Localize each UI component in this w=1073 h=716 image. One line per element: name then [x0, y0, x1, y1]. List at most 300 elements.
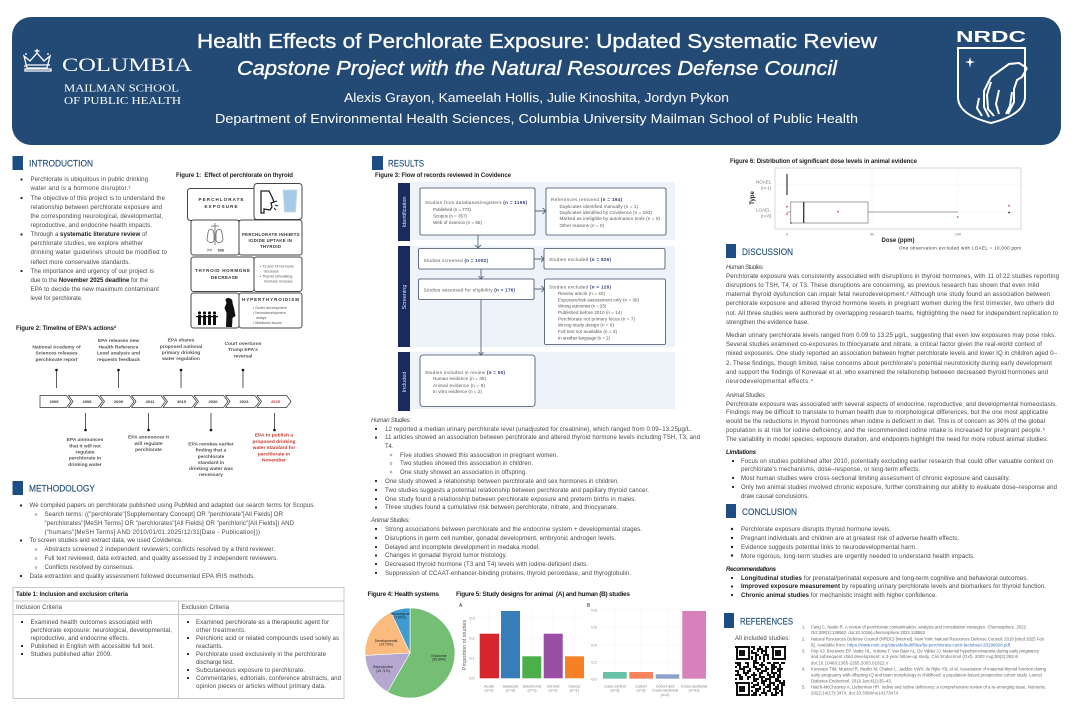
discussion text: limitations: Most human studies were cross-sectional limiting assessment of chronic exposure and causality. [741, 475, 1010, 482]
conclusion bullets: Pregnant individuals and children are at greatest risk of adverse health effects. [741, 535, 959, 542]
results text: human and animal studies: One study showed a relationship between perchlorate and sex hormones in children. [385, 478, 619, 485]
table 1: inclusion and exclusion criteria [13, 588, 344, 698]
results text: human and animal studies: Strong associations between perchlorate and the endocrine system + developmental stages. [385, 526, 642, 533]
figure 4: health systems pie chart: (15.71%) [376, 669, 390, 673]
figure 2: timeline of EPA's actions: regulate [75, 450, 95, 456]
chart A: animal studies: (n=3) [506, 688, 516, 692]
department: Department of Environmental Health Sciences, Columbia University Mailman School of Public Health [215, 111, 858, 126]
logo: Columbia Mailman School: COLUMBIA [62, 55, 192, 76]
reference list: early pregnancy with offspring IQ and brain morphology in childhood: a population-based prospective cohort study. Lancet [811, 672, 1043, 678]
figure 3: flow of records: In another language (n = 2) [558, 336, 610, 340]
figure 2: timeline of EPA's actions: perchlorate [135, 447, 162, 453]
results text: human and animal studies: Two studies showed this association in children. [400, 460, 533, 467]
heading: discussion [726, 244, 793, 258]
figure 2: timeline of EPA's actions: Sciences releases [35, 351, 78, 357]
reference list: Hatch-McChesney A, Lieberman HR. Iodine and Iodine deficiency: a comprehensive review of a re-emerging issue. Nutrients. [811, 684, 1046, 690]
introduction text: drinking water guidelines should be modified to [30, 249, 168, 256]
figure 3: flow of records: Web of Science (n = 65) [433, 220, 482, 225]
conclusion bullets: Evidence suggests potential links to neurodevelopmental harm. [741, 544, 917, 551]
figure 3: flow of records: In vitro evidence (n = 2) [433, 389, 482, 394]
table 1: inclusion and exclusion criteria: opinion pieces or articles without primary data. [196, 683, 326, 690]
results text: human and animal studies: Animal Studies: [370, 517, 410, 524]
figure 3: flow of records: Studies from databases/registers (n = 1195) [425, 200, 527, 205]
table 1: inclusion and exclusion criteria: Subcutaneous exposure to perchlorate. [196, 667, 305, 674]
discussion text: human studies: mixed exposures. One study reported an association between higher perchlorate levels and lower IQ in children aged 0– [726, 350, 1058, 357]
chart B: human studies: Cross-sectional [681, 684, 707, 688]
discussion text: human studies: Human Studies [726, 264, 763, 271]
results text: human and animal studies: Three studies found a cumulative risk between perchlorate, nitrate, and thiocyanate. [385, 504, 618, 511]
figure 1: effect of perchlorate on thyroid: HYPERTHYROIDISM [242, 297, 299, 302]
results text: human and animal studies: Delayed and incomplete development in medaka model. [385, 544, 540, 551]
recommendations: Recommendations [726, 566, 777, 573]
figure 2: timeline of EPA's actions: National Academy of [32, 344, 81, 350]
reference list: 1. [802, 624, 806, 630]
introduction text: water and is a hormone disruptor.¹ [30, 185, 130, 192]
table 1: inclusion and exclusion criteria: Inclusion Criteria [16, 604, 63, 611]
figure 3: flow of records [375, 172, 675, 411]
figure 2: timeline of EPA's actions: 2019 [177, 399, 187, 404]
figure 2: timeline of EPA's actions: requests feedback [97, 357, 140, 363]
figure 3: flow of records: Studies included in review (n = 50) [425, 370, 505, 375]
figure 2: timeline of EPA's actions: 2011 [146, 399, 155, 404]
authors: Alexis Grayon, Kameelah Hollis, Julie Kinoshita, Jordyn Pykon [344, 90, 729, 105]
table 1: inclusion and exclusion criteria: Table 1: Inclusion and exclusion criteria [16, 591, 129, 598]
QR code [735, 647, 785, 695]
methodology text: Abstracts screened 2 independent reviewers; conflicts resolved by a third reviewer. [44, 546, 275, 553]
chart A: animal studies: 0.2 [469, 636, 475, 640]
results text: human and animal studies: One study found a relationship between perchlorate exposure and preterm births in males. [385, 496, 636, 503]
chart A: animal studies: Acute [484, 684, 494, 688]
discussion text: human studies: neurodevelopmental effects.⁴ [726, 378, 813, 385]
chart B: human studies [587, 603, 708, 697]
figure 3: flow of records: Published (n = 773) [433, 207, 471, 212]
logo: Columbia Mailman School: OF PUBLIC HEALTH [64, 96, 181, 107]
results text: human and animal studies: Changes in gonadal thyroid tumor histology. [385, 552, 507, 559]
discussion text: human studies: 2. These findings, though limited, raise concerns about perchlorate's potential neurotoxicity during early development [726, 360, 1052, 367]
panel: conclusion [726, 504, 1046, 599]
figure 3: flow of records: Wrong outcomes (n = 23) [558, 304, 606, 308]
figure 2: timeline of EPA's actions: 2005 [50, 399, 59, 404]
figure 1: effect of perchlorate on thyroid: • Goiter development [253, 306, 287, 310]
figure 3: flow of records: Perchlorate not primary focus (n = 7) [558, 316, 635, 322]
chart B: human studies: (n=3) [611, 688, 620, 692]
figure 2: timeline of EPA's actions: drinking water was [189, 466, 233, 472]
conclusion bullets: Perchlorate exposure disrupts thyroid hormone levels. [741, 526, 891, 533]
discussion text: human studies: Several studies examined co-exposures to thiocyanate and nitrate, a critical factor given the real-world context of [726, 341, 1042, 348]
figure 2: timeline of EPA's actions: 2008 [83, 399, 92, 404]
figure 3: flow of records: Identification [402, 197, 408, 227]
reference list: 3. [802, 648, 806, 654]
table 1: inclusion and exclusion criteria: Published in English with accessible full text. [30, 643, 154, 650]
figure 2: timeline of EPA's actions: water regulation [161, 356, 200, 362]
title: Health Effects of Perchlorate Exposure: Updated Systematic Review [197, 30, 877, 53]
figure 1: effect of perchlorate on thyroid: IODIDE UPTAKE IN [248, 238, 292, 243]
chart A: animal studies: (n=2) [549, 688, 558, 692]
chart A: animal studies: (n=2) [485, 688, 494, 692]
chart A: animal studies: 0.3 [469, 616, 475, 620]
figure 2: timeline of EPA's actions: will regulate [133, 441, 163, 447]
introduction text: reflect more conservative standards. [30, 259, 130, 266]
chart A: animal studies: (n=1) [570, 688, 580, 692]
figure 2: timeline of EPA's actions: EPA revokes earlier [188, 442, 234, 448]
recommendations: Improved exposure measurement by repeating urinary perchlorate levels and biomarkers for thyroid function. [741, 583, 1046, 590]
methodology text: We compiled papers on perchlorate published using PubMed and adapted our search terms for Scopus. [30, 502, 315, 509]
introduction text: perchlorate studies, we explore whether [30, 240, 143, 247]
table 1: inclusion and exclusion criteria: Commentaries, editorials, conference abstracts, and [196, 675, 341, 682]
panel: references [724, 613, 1047, 696]
recommendations: Longitudinal studies for prenatal/perinatal exposure and long-term cognitive and behavioral outcomes. [741, 575, 1028, 582]
introduction text: due to the November 2025 deadline for the [30, 277, 149, 284]
table 1: inclusion and exclusion criteria: discharge test. [196, 659, 234, 666]
chart B: human studies: (n=2) [661, 693, 670, 697]
chart B: human studies: Case-control [604, 684, 626, 688]
chart B: human studies: 0.0 [591, 678, 597, 682]
figure 2: timeline of EPA's actions: 2009 [114, 399, 124, 404]
discussion text: human studies: perchlorate exposure and altered thyroid hormone levels in pregnant women during the first trimester, two others did [726, 300, 1054, 307]
panel: discussion [725, 244, 1059, 500]
chart A: animal studies: 0.1 [469, 656, 475, 660]
discussion text: limitations: Only two animal studies involved chronic exposure, further constraining our ability to evaluate dose–response and [741, 484, 1057, 491]
flow arrows [475, 208, 546, 355]
figure 6: dose distribution box plot: (n=8) [761, 214, 772, 218]
figure 2: timeline of EPA's actions: Court overturns [225, 341, 262, 347]
chart B: human studies: Cross-sectional [652, 688, 678, 692]
figure 5: study designs bar charts: Figure 5: Study designs for animal (A) and human (B) studies [456, 591, 630, 598]
reference list: 2022;14(17):3474. doi:10.3390/nu14173474 [811, 690, 899, 696]
methodology text: ("humans"[MeSH Terms] AND 2010/01/01:2025/12/31[Date - Publication])) [44, 529, 260, 536]
introduction text: the corresponding neurological, developmental, [30, 213, 163, 220]
methodology text: Search terms: (("perchlorate"[Supplementary Concept] OR "perchlorate"[All Fields] OR [44, 511, 284, 518]
figure 6: dose distribution box plot: Dose (ppm) [882, 238, 915, 244]
recommendations: Chronic animal studies for mechanistic insight with higher confidence. [741, 592, 937, 599]
heading: results: RESULTS [388, 158, 424, 170]
figure 3: flow of records: Human evidence (n = 39) [433, 376, 486, 381]
recommendations [726, 566, 1046, 599]
figure 1: effect of perchlorate on thyroid: NIS [218, 248, 225, 252]
figure 2: timeline of EPA's actions: EPA shares [168, 338, 195, 344]
figure 1: effect of perchlorate on thyroid: delays [256, 316, 267, 320]
figure 1: effect of perchlorate on thyroid: EXPOSURE [204, 204, 238, 209]
heading: methodology: METHODOLOGY [29, 484, 96, 494]
figure 3: flow of records: Review article (n = 40) [558, 291, 605, 296]
discussion text: human studies: and support the findings of Korevaar et al. who examined the relationship between decreased thyroid hormones and [726, 369, 1048, 376]
figure 3: flow of records: Studies excluded (n = 826) [549, 257, 611, 262]
chart A: animal studies: Subacute [502, 684, 519, 688]
figure 2: timeline of EPA's actions: perchlorate in [69, 456, 101, 462]
table 1: inclusion and exclusion criteria: Exclusion Criteria [182, 604, 230, 611]
methodology text: Full text reviewed, data extracted, and quality assessed by 2 independent reviewers. [44, 555, 278, 562]
figure 6: dose distribution box plot [730, 158, 1021, 250]
reference list: 4. [802, 666, 806, 672]
reference list: Diabetes Endocrinol. 2016 Jan;4(1):35–43. [811, 678, 892, 684]
discussion text: limitations: Focus on studies published after 2010, potentially excluding earlier research that could offer valuable context on [741, 458, 1053, 465]
chart B: human studies: Cohort [635, 684, 648, 688]
figure 3: flow of records: Studies screened (n = 1002) [424, 258, 488, 263]
results text: human and animal studies: One study showed an association in offspring. [400, 469, 527, 476]
heading: introduction: INTRODUCTION [29, 158, 93, 170]
discussion text: human studies: disruptions to TSH, T4, or T3. These disruptions are concerning, as previous research has shown that even mild [726, 282, 1039, 289]
figure 3: flow of records: Duplicates identified by Covidence (n = 193) [560, 210, 652, 215]
figure 1: effect of perchlorate on thyroid: • Neurodevelopment [253, 311, 286, 315]
methodology text: Conflicts resolved by consensus. [44, 564, 134, 571]
reference list [802, 624, 1047, 696]
figure 2: timeline of EPA's actions: proposed national [160, 344, 203, 350]
discussion text: animal studies: would be the reductions in thyroid hormones when iodine is deficient in diet. This is of concern as 30% of the global [725, 418, 1045, 425]
chart B: human studies: 0.8 [591, 608, 597, 612]
reference list: and subsequent child development: a 3-year follow-up study. Clin Endocrinol (Oxf). 2003 Aug;59(2):282-8. [811, 654, 1019, 659]
chart B: human studies: (n=3) [637, 688, 646, 692]
figure 2: timeline of EPA's actions: Figure 2: Timeline of EPA's actions² [16, 325, 116, 332]
introduction text: EPA to decide the new maximum contaminant [30, 286, 159, 293]
panel: results [365, 156, 708, 698]
figure 1: effect of perchlorate on thyroid: Figure 1: Effect of perchlorate on thyroid [176, 172, 293, 179]
introduction text [20, 176, 168, 302]
heading: discussion: DISCUSSION [742, 247, 793, 258]
methodology text: To screen studies and extract data, we used Covidence. [30, 537, 183, 544]
figure 1: effect of perchlorate on thyroid: THYROID HORMONE [195, 268, 250, 273]
results text: human and animal studies: 11 articles showed an association between perchlorate and altered thyroid hormone levels including TSH, T3, and [385, 434, 700, 441]
chart B: human studies: B [587, 603, 591, 609]
figure 6: dose distribution box plot: 100 [955, 232, 961, 236]
figure 2: timeline of EPA's actions: drinking water [68, 462, 102, 468]
figure 1: effect of perchlorate on thyroid: hormone increase [264, 280, 293, 284]
figure 6: dose distribution box plot: Type [750, 191, 756, 205]
figure 2: timeline of EPA's actions: Level analysis and [97, 351, 140, 357]
figure 3: flow of records: Figure 3: Flow of records reviewed in Covidence [375, 172, 512, 179]
figure 2: timeline of EPA's actions: necessary [199, 472, 223, 478]
introduction text: Perchlorate is ubiquitous in public drinking [30, 176, 148, 183]
figure 6: dose distribution box plot: NOAEL [756, 180, 772, 184]
chart A: animal studies: Chronic [546, 684, 560, 688]
figure 4: health systems pie chart [365, 591, 455, 698]
figure 4: health systems pie chart: (56.89%) [432, 658, 446, 662]
reference list: Fang C, Naidu R. A review of perchlorate contamination: analysis and remediation strategies. Chemosphere. 2022 [811, 624, 1027, 630]
figure 2: timeline of EPA's actions: perchlorate report [35, 357, 78, 363]
figure 1: effect of perchlorate on thyroid [176, 172, 302, 328]
figure 2: timeline of EPA's actions: primary drinking [162, 350, 200, 356]
chart A: animal studies: A [459, 603, 463, 609]
table 1: inclusion and exclusion criteria: reproductive, and endocrine effects. [30, 635, 129, 642]
figure 3: flow of records: Scopus (n = 357) [433, 214, 467, 218]
reference list: 5. [802, 684, 806, 690]
chart B: human studies: 0.6 [591, 626, 597, 630]
figure 4: health systems pie chart: (7.69%) [394, 616, 406, 620]
heading: references [724, 613, 793, 628]
figure 1: effect of perchlorate on thyroid: DECREASE [211, 275, 238, 280]
conclusion bullets: More rigorous, long-term studies are urgently needed to understand health impacts. [741, 553, 975, 560]
introduction text: The importance and urgency of our project is [30, 268, 154, 275]
figure 2: timeline of EPA's actions: reversal [234, 354, 253, 360]
figure 3: flow of records: Published before 2010 (n = 14) [558, 310, 622, 315]
figure 4: health systems pie chart: Figure 4: Health systems [368, 591, 439, 598]
figure 3: flow of records: Studies excluded (n = 126) [549, 284, 611, 290]
figure 4: health systems pie chart: (19.70%) [379, 642, 393, 646]
logo: NRDC [956, 29, 1027, 123]
figure 3: flow of records: Included [402, 372, 408, 392]
results text: human and animal studies: Decreased thyroid hormone (T3 and T4) levels with iodine-deficient diets. [385, 561, 588, 568]
figure 1: effect of perchlorate on thyroid: PERCHLORATE INHIBITS [242, 232, 300, 237]
reference list: Korevaar TIM, Muetzel R, Medici M, Chaker L, Jaddoe VWV, de Rijke YB, et al. Association of maternal thyroid function during [811, 666, 1047, 672]
methodology text: "perchlorates"[MeSH Terms] OR "perchlorates"[All Fields] OR "perchloric"[All Fields]) AND [44, 520, 295, 527]
discussion text: limitations: perchlorate's mechanisms, dose–response, or long-term effects. [741, 466, 920, 473]
discussion text: human studies [726, 264, 1059, 385]
figure 2: timeline of EPA's actions: water standard for [252, 445, 295, 451]
chart A: animal studies: 0.0 [469, 676, 475, 680]
introduction text: level for perchlorate. [30, 295, 83, 302]
results text: human and animal studies: Human Studies: [371, 417, 411, 424]
figure 3: flow of records: Wrong study design (n = 8) [558, 322, 614, 328]
figure 3: flow of records: Animal evidence (n = 9) [433, 383, 485, 388]
heading: references: REFERENCES [740, 616, 793, 628]
logo: Columbia Mailman School: MAILMAN SCHOOL [64, 84, 179, 94]
discussion text: animal studies: The variability in model species, exposure duration, and endpoints highlight the need for more robust animal studies. [726, 436, 1048, 443]
timeline connectors [55, 369, 276, 431]
discussion text: human studies: maternal thyroid dysfunction can impair fetal neurodevelopment.³ Although one study found an association between [726, 291, 1050, 298]
figure 2: timeline of EPA's actions: perchlorate [198, 454, 225, 460]
QR code caption: All included studies: [735, 635, 790, 642]
figure 2: timeline of EPA's actions: proposed drinking [253, 439, 295, 445]
reference list: Oct;308(1):136562. doi:10.1016/j.chemosphere.2022.136562 [811, 630, 926, 635]
results text: human and animal studies: Suppression of CCAAT-enhancer-binding proteins, thyroid peroxidase, and thyroglobulin. [385, 570, 631, 577]
conclusion bullets [731, 526, 975, 560]
figure 2: timeline of EPA's actions: EPA announces it [128, 435, 169, 441]
results text: human and animal studies: T4. [385, 443, 393, 450]
icon: thyroid [207, 223, 223, 251]
discussion text: human studies: Perchlorate exposure was consistently associated with disruptions in thyroid hormones, with 11 of 22 studies reporting [726, 273, 1059, 280]
figure 1: effect of perchlorate on thyroid: PERCHLORATE [198, 197, 244, 202]
figure 3: flow of records: Duplicates identified manually (n = 1) [560, 204, 638, 209]
heading: results [372, 156, 424, 170]
methodology text: Data extraction and quality assessment followed documented EPA IRIS methods. [30, 573, 255, 580]
chart B: human studies: 0.2 [591, 660, 597, 664]
figure 3: flow of records: References removed (n = 194) [551, 197, 622, 202]
discussion text: animal studies: Animal Studies [725, 392, 765, 399]
results text: human and animal studies [370, 417, 700, 577]
chart B: human studies: Cohort and [656, 684, 674, 688]
figure 1: effect of perchlorate on thyroid: • Thyroid stimulating [260, 274, 292, 278]
discussion text: human studies: Median urinary perchlorate levels ranged from 0.09 to 13.25 µg/L, suggesting that even low exposures may pose risks. [726, 332, 1056, 339]
discussion text: animal studies: population is at risk for iodine deficiency, and the recommended iodine intake is increased for pregnant people.⁵ [726, 427, 1045, 434]
figure 3: flow of records: Marked as ineligible by automation tools (n = 0) [560, 216, 660, 221]
figure 3: flow of records: Screening [402, 285, 408, 309]
table 1: inclusion and exclusion criteria: other treatments. [196, 627, 246, 634]
table 1: inclusion and exclusion criteria: Examined health outcomes associated with [30, 619, 152, 626]
figure 2: timeline of EPA's actions: Health Reference [99, 344, 139, 350]
reference list: doi:10.1046/j.1365-2265.2003.01822.x [811, 660, 889, 666]
panel: introduction [12, 156, 168, 302]
table 1: inclusion and exclusion criteria: Perchloric acid or related compounds used solely as [196, 635, 339, 642]
table 1: inclusion and exclusion criteria: Studies published after 2009. [30, 651, 112, 658]
introduction text: reproductive, and endocrine health impacts. [30, 222, 152, 229]
figure 2: timeline of EPA's actions: Trump EPA's [228, 347, 258, 353]
reference list: Pop VJ, Brouwers EP, Vader HL, Vulsma T, Van Baar AL, De Vijlder JJ. Maternal hypothyroxinaemia during early pregnancy [811, 648, 1040, 654]
figure 3: flow of records: Exposure/risk assessment only (n = 30) [558, 298, 639, 302]
introduction text: Through a systematic literature review of [30, 231, 147, 238]
panel: methodology [12, 481, 344, 698]
figure 2: timeline of EPA's actions: perchlorate in [258, 451, 290, 457]
heading: conclusion [726, 504, 797, 518]
chart A: animal studies [459, 603, 586, 692]
subtitle: Capstone Project with the Natural Resources Defense Council [237, 57, 839, 80]
table 1: inclusion and exclusion criteria: perchlorate exposure: neurological, developmental, [30, 627, 172, 634]
timeline chevrons [40, 396, 291, 408]
heading: methodology [12, 481, 96, 495]
heading: conclusion: CONCLUSION [742, 507, 797, 518]
figure 2: timeline of EPA's actions: 2020 [209, 399, 218, 404]
figure 2: timeline of EPA's actions: EPA announces [67, 437, 104, 443]
discussion text: animal studies [725, 392, 1057, 443]
results text: human and animal studies: Five studies showed this association in pregnant women. [400, 452, 558, 459]
figure 1: effect of perchlorate on thyroid: THYROID [260, 244, 281, 249]
discussion text: limitations [726, 449, 1057, 500]
figure 2: timeline of EPA's actions: November [262, 458, 286, 464]
figure 3: flow of records: Full text not available (n = 3) [558, 329, 617, 334]
figure 1: effect of perchlorate on thyroid: decrease [264, 270, 279, 274]
header banner [12, 17, 1061, 145]
table 1: inclusion and exclusion criteria: reactants. [196, 643, 223, 650]
discussion text: limitations: Limitations [726, 449, 757, 456]
figure 2: timeline of EPA's actions: EPA releases new [98, 338, 139, 344]
table 1: inclusion and exclusion criteria: Examined perchlorate as a therapeutic agent for [196, 619, 329, 626]
figure 6: dose distribution box plot: One observation excluded with LOAEL = 10,000 ppm [899, 246, 1021, 250]
figure 2: timeline of EPA's actions: 2025 [271, 399, 281, 404]
figure 6: dose distribution box plot: 0 [786, 232, 788, 236]
logo: Columbia Mailman School [24, 49, 192, 107]
figure 1: effect of perchlorate on thyroid: • T3 and T4 hormone [260, 264, 294, 268]
reference list: 2. [802, 636, 806, 642]
chart A: animal studies: Proportion of studies [462, 620, 468, 670]
results text: human and animal studies: Two studies suggests a potential relationship between perchlorate and papillary thyroid cancer. [385, 487, 649, 494]
discussion text: human studies: not. All three studies were authored by overlapping research teams, highlighting the need for independent replication to [726, 310, 1059, 317]
icon: family silhouette [196, 298, 236, 327]
chart A: animal studies: Cancer [568, 684, 581, 688]
figure 2: timeline of EPA's actions [16, 325, 295, 478]
figure 3: flow of records: Studies assessed for eligibility (n = 176) [424, 288, 515, 292]
reference list: Natural Resources Defense Council (NRDC) [Internet]. New York: Natural Resources Defense Council; 2018 [cited 2025 Feb [811, 636, 1045, 642]
figure 4: health systems pie chart: Developmental [375, 639, 398, 643]
figure 1: effect of perchlorate on thyroid: • Metabolic issues [253, 321, 282, 325]
heading: introduction [12, 156, 93, 170]
introduction text: relationship between perchlorate exposure and [30, 204, 162, 211]
figure 3: flow of records: Other reasons (n = 0) [560, 223, 604, 228]
results text: human and animal studies: Disruptions in germ cell number, gonadal development, embryonic androgen levels. [385, 535, 616, 542]
figure 4: health systems pie chart: Endocrine [431, 654, 447, 658]
introduction text: The objective of this project is to understand the [30, 195, 166, 202]
figure 4: health systems pie chart: Neurological [391, 612, 410, 616]
chart B: human studies: 0.4 [591, 644, 597, 648]
figure 2: timeline of EPA's actions: finding that a [196, 448, 227, 454]
figure 6: dose distribution box plot: LOAEL [756, 208, 771, 212]
results text: human and animal studies: 12 reported a median urinary perchlorate level (unadjusted for creatinine), which ranged from 0.09–13.25µg/L. [385, 426, 692, 433]
logo: NRDC: NRDC [956, 29, 1027, 46]
figure 2: timeline of EPA's actions: standard in [198, 460, 224, 466]
reference list: 6]. Available from: https://www.nrdc.org/sites/default/files/bu-perchlorate-contr-factsheet-20180928.pdf [811, 642, 1011, 648]
figure 6: dose distribution box plot: Figure 6: Distribution of significant dose levels in animal evidence [730, 158, 918, 165]
discussion text: human studies: strengthen the evidence base. [726, 319, 809, 326]
figure 2: timeline of EPA's actions: that it will not [69, 444, 101, 450]
figure 2: timeline of EPA's actions: EPA to publish a [255, 433, 293, 439]
icon: head and water glass [261, 190, 297, 213]
discussion text: animal studies: Findings may be difficult to translate to human health due to morphological differences, but the one most applicable [726, 409, 1049, 416]
discussion text: limitations: draw causal conclusions. [741, 493, 809, 500]
figure 6: dose distribution box plot: 50 [870, 232, 874, 236]
figure 6: dose distribution box plot: (n=1) [761, 186, 772, 190]
methodology text [20, 502, 315, 580]
chart A: animal studies: (n=1) [528, 688, 537, 692]
chart A: animal studies: Subchronic [522, 684, 542, 688]
figure 2: timeline of EPA's actions: 2023 [240, 399, 249, 404]
figure 4: health systems pie chart: Reproductive [373, 665, 393, 669]
